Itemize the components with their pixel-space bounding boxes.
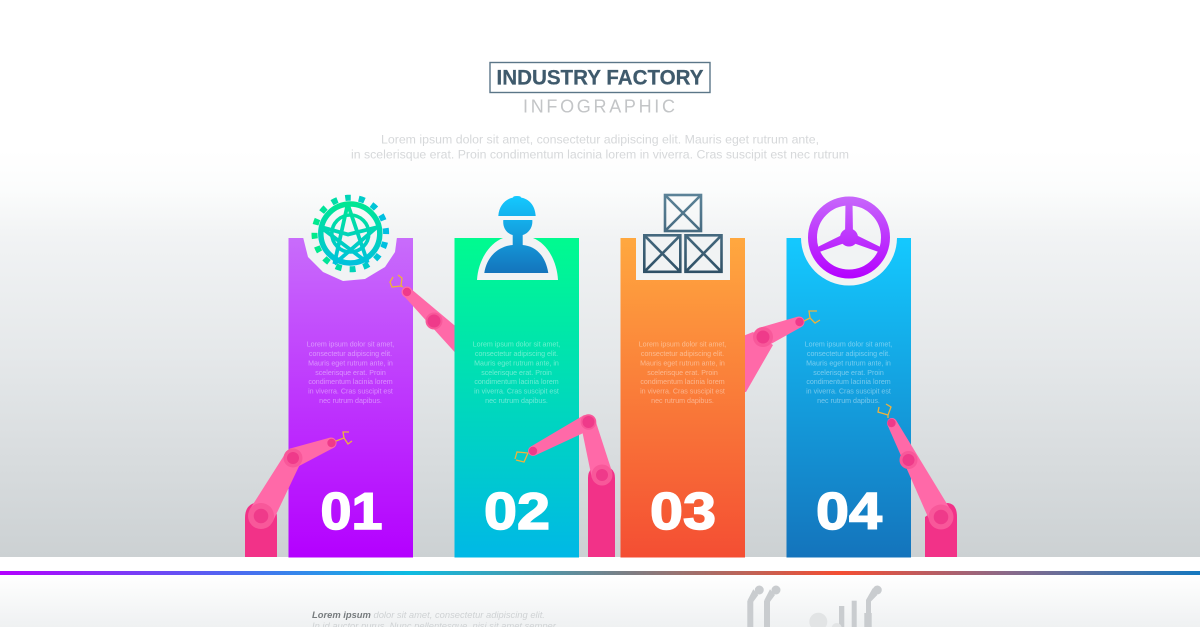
text block: column 2: scelerisque erat. Proin <box>481 369 552 377</box>
icon: crates <box>644 195 722 272</box>
text block: column 2: Lorem ipsum dolor sit amet, <box>473 340 560 348</box>
icon: worker <box>484 196 548 273</box>
numbers: 04 <box>816 483 882 541</box>
text block: column 1: consectetur adipiscing elit. <box>309 350 392 358</box>
panel: 02 column <box>454 238 579 558</box>
text block: column 3: nec rutrum dapibus. <box>651 397 714 405</box>
robot arm: between columns 3 and 4 <box>738 311 820 392</box>
text block: column 1: Lorem ipsum dolor sit amet, <box>307 340 394 348</box>
text block: column 4: scelerisque erat. Proin <box>813 369 884 377</box>
text block: column 2 <box>473 340 560 405</box>
text block: column 3: Lorem ipsum dolor sit amet, <box>639 340 726 348</box>
text block: column 3: consectetur adipiscing elit. <box>641 350 724 358</box>
robot arm: column 4 <box>878 404 957 557</box>
text block: column 1 <box>307 340 394 405</box>
gripper <box>804 311 817 321</box>
panel: 04 column <box>786 238 911 558</box>
panel: 01 column <box>288 237 413 558</box>
text block: column 3: in viverra. Cras suscipit est <box>640 388 725 396</box>
text block: column 1: condimentum lacinia lorem <box>308 378 393 386</box>
text block: column 2: nec rutrum dapibus. <box>485 397 548 405</box>
text block: column 4: in viverra. Cras suscipit est <box>806 388 891 396</box>
robot arm: column 2 <box>515 414 615 557</box>
text block: column 4: consectetur adipiscing elit. <box>807 350 890 358</box>
robot arm: column 1 <box>245 432 352 557</box>
text block: column 3: scelerisque erat. Proin <box>647 369 718 377</box>
intro text: in scelerisque erat. Proin condimentum lacinia lorem in viverra. Cras suscipit est nec rutrum <box>351 148 849 162</box>
robot arm: between columns 1 and 2 <box>390 275 460 358</box>
text block: column 4: Lorem ipsum dolor sit amet, <box>805 340 892 348</box>
gripper <box>515 452 528 459</box>
text block: column 2: in viverra. Cras suscipit est <box>474 388 559 396</box>
text block: column 1: in viverra. Cras suscipit est <box>308 388 393 396</box>
wheel notch <box>801 238 897 286</box>
text block: column 1: scelerisque erat. Proin <box>315 369 386 377</box>
numbers: 03 <box>650 483 716 541</box>
panel: 03 column <box>620 238 745 558</box>
footer text <box>312 609 557 627</box>
text block: column 4 <box>805 340 892 405</box>
icon: gear <box>312 195 389 272</box>
text block: column 4: condimentum lacinia lorem <box>806 378 891 386</box>
icon: steering wheel <box>812 201 886 274</box>
text block: column 1: nec rutrum dapibus. <box>319 397 382 405</box>
intro text <box>351 132 849 162</box>
title: INDUSTRY FACTORY <box>496 66 704 90</box>
text block: column 3: condimentum lacinia lorem <box>640 378 725 386</box>
text block: column 4: nec rutrum dapibus. <box>817 397 880 405</box>
gear notch <box>303 237 397 281</box>
footer icon: robot silhouettes <box>747 586 882 627</box>
text block: column 1: Mauris eget rutrum ante, in <box>308 360 393 368</box>
gradient divider line <box>0 571 1200 575</box>
text block: column 2: Mauris eget rutrum ante, in <box>474 360 559 368</box>
subtitle: INFOGRAPHIC <box>523 96 675 116</box>
crates notch <box>636 238 730 280</box>
text block: column 3 <box>639 340 726 405</box>
text block: column 2: consectetur adipiscing elit. <box>475 350 558 358</box>
gripper <box>336 432 349 441</box>
numbers <box>320 483 882 541</box>
text block: column 2: condimentum lacinia lorem <box>474 378 559 386</box>
gripper <box>878 407 888 418</box>
numbers: 01 <box>320 483 382 541</box>
gripper <box>390 277 403 287</box>
footer text: Lorem ipsum dolor sit amet, consectetur adipiscing elit. <box>312 609 545 620</box>
text block: column 4: Mauris eget rutrum ante, in <box>806 360 891 368</box>
worker notch <box>477 238 558 280</box>
text block: column 3: Mauris eget rutrum ante, in <box>640 360 725 368</box>
intro text: Lorem ipsum dolor sit amet, consectetur adipiscing elit. Mauris eget rutrum ante, <box>381 132 819 146</box>
numbers: 02 <box>484 483 550 541</box>
